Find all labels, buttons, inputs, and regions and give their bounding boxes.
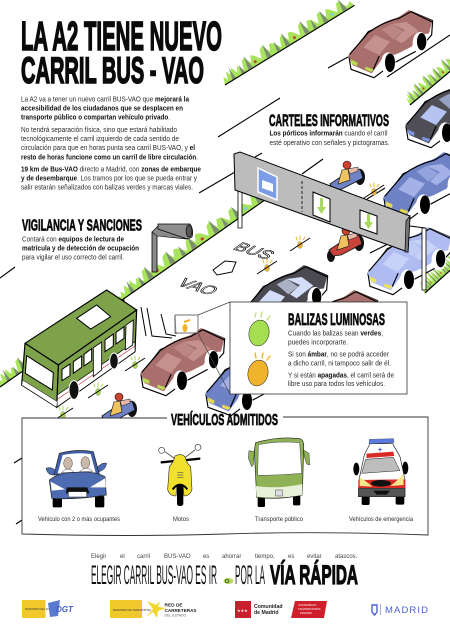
car: mauve behind panel [293,290,378,358]
logo: ministerio de transportes: MINISTERIO DE TRANSPORTES [113,609,151,612]
vigilancia y sanciones [22,218,142,262]
closing small line: el [120,554,125,560]
icon: blue car front [46,450,107,507]
bus roof hatch [77,305,111,329]
grass strip lower left [0,287,125,387]
intro text: accesibilidad de los ciudadanos que se desplacen en [21,106,183,112]
vigilancia text: Contará con equipos de lectura de [22,236,124,244]
intro text: transporte público o compartan vehículo privado. [21,114,170,122]
balizas text: libre uso para todos los vehículos. [288,381,385,388]
bus side [57,310,137,407]
beacons on the road [53,183,384,421]
road stripes [141,307,176,338]
bus windscreen [25,356,53,390]
intro text: resto de horas funcione como un carril de libre circulación. [21,154,198,162]
closing small line: es [288,554,294,560]
road chevron marking [213,261,236,275]
motorbike: near bus [100,393,137,428]
vigilancia heading: VIGILANCIA Y SANCIONES [22,218,142,234]
logo: consorcio transportes: CONSORCIO [298,603,317,607]
bus roof [25,290,137,365]
logo: consorcio transportes: TRANSPORTES [298,607,320,611]
carteles informativos [269,112,390,147]
logo: red de carreteras: RED DE [164,602,183,608]
car: dark grey upper right [405,80,450,148]
intro text: La A2 va a tener un nuevo carril BUS-VAO que mejorará la [21,96,189,104]
car: blue under panel [205,348,290,416]
carteles text: esté operativo con señales y pictogramas. [270,140,390,147]
closing small line: evitar [307,554,322,560]
icon: amber beacon [246,353,270,388]
icon: green beacon [247,312,271,348]
arrow sign one [313,192,330,222]
car: dark centre [243,265,328,333]
balizas text: a dicho carril, ni tampoco salir de él. [288,360,391,368]
intro text: tecnológicamente el carril izquierdo de cada sentido de [21,136,179,143]
vigilancia text [22,236,139,262]
logo: comunidad de madrid: de Madrid [254,610,278,616]
logo: comunidad de madrid: Comunidad [254,604,283,610]
logo: comunidad de madrid: ★★★ [237,608,248,613]
balizas text [288,330,394,388]
logo: madrid: MADRID [385,605,428,616]
motorbike: red [327,227,364,262]
panel: balizas luminosas [230,302,407,394]
closing small line: es [203,554,209,560]
grass strip lower right [414,251,450,293]
vehicle labels [38,517,414,523]
vehicle labels: Motos [173,517,189,523]
logo: red de carreteras [146,601,197,618]
logo: ministerio de transportes [110,600,151,618]
car: mauve top right [348,10,433,78]
surveillance camera [152,224,193,272]
vehicle labels: Transporte público [255,517,304,523]
closing small line: BUS-VAO [164,554,191,560]
logo: consorcio transportes: MADRID [300,611,313,615]
slogan: POR LA [235,560,265,590]
bus doors [93,320,133,377]
bus side lower strip [57,342,135,407]
closing small line: atascos. [335,554,358,560]
closing small line: ahorrar [222,554,241,560]
grass strip median [113,182,271,300]
grass strip upper [217,0,354,85]
intro text: No tendrá separación física, sino que estará habilitado [21,127,177,134]
bus side windows [62,327,124,381]
intro text [21,96,201,192]
logo: ministerio del interior and DGT [22,600,74,618]
callout marker over amber beacon [175,302,230,394]
vehicle labels: Vehículos de emergencia [349,517,414,523]
vigilancia text: para vigilar el uso correcto del carril. [22,254,124,262]
closing small line: carril [137,554,150,560]
car: light blue lower right [367,227,450,295]
text: LA A2 TIENE NUEVO [21,13,222,59]
icon: slogan beacon [224,578,234,584]
bus front [22,343,58,407]
intro text: circulación para que en horas punta sea carril BUS-VAO, y el [21,145,195,152]
logo: consorcio transportes [291,601,327,618]
logo: red de carreteras: CARRETERAS [164,608,197,614]
intro text: 19 km de Bus-VAO directo a Madrid, con zonas de embarque [21,166,201,174]
road lettering BUS: BUS [229,240,279,262]
balizas text: Si son ámbar, no se podrá acceder [288,352,390,358]
icon: ambulance front [353,439,408,505]
motorbike: upper [328,161,365,196]
closing small line: tiempo, [255,554,275,560]
carteles text: Los pórticos informarán cuando el carril [270,130,388,138]
intro text: y de desembarque. Los tramos por los que se pueda entrar y [21,176,197,182]
car: blue right [383,152,450,220]
gantry legs [238,186,426,290]
intro text: salir estarán señalizados con balizas verdes y marcas viales. [21,184,193,192]
blue bus-vao sign [258,168,277,200]
logo: comunidad de madrid [235,601,283,618]
closing small line: Elegir [91,554,106,560]
carteles text [270,130,390,147]
grass strip right [400,39,450,105]
vehicle labels: Vehículo con 2 o más ocupantes [38,517,120,523]
vehiculos heading: VEHÍCULOS ADMITIDOS [171,410,278,429]
title: CARRIL BUS - VAO [21,50,204,91]
lane markings [0,35,450,524]
logo: red de carreteras: DEL ESTADO [164,614,187,618]
balizas text: puedes incorporarte. [288,340,348,346]
panel: vehiculos admitidos [22,410,428,536]
icon: green bus front [248,438,310,507]
logo: ministerio del interior and DGT: MINISTERIO DEL INTERIOR [25,608,58,611]
arrow sign two [360,210,377,234]
slogan: VÍA RÁPIDA [270,559,358,590]
vigilancia text: matrícula y de detección de ocupación [22,246,139,252]
car: mauve near bus [140,328,225,396]
balizas text: Y si están apagadas, el carril será de [288,372,394,380]
logo: ministerio del interior and DGT: DGT [56,605,74,614]
gantry with signs [234,152,426,290]
balizas text: Cuando las balizas sean verdes, [288,330,383,338]
gantry beam [234,152,410,252]
bus wheels [69,381,79,399]
logos [22,600,428,618]
bus illustration [22,290,137,407]
road lettering VAO: VAO [173,276,223,298]
icon: yellow scooter [159,444,201,506]
title [21,13,222,91]
